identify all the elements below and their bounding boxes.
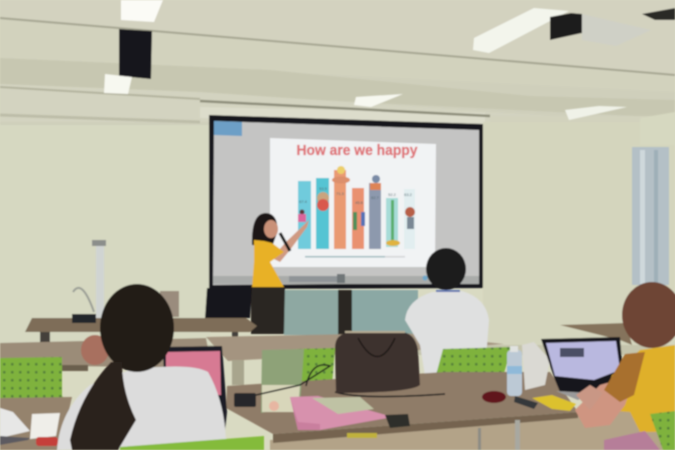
attendee in white shirt [405,248,489,376]
front left table [0,397,72,450]
chart legend [305,256,405,258]
bar chart: 45.6 [355,200,364,205]
bar chart: 71.3 [336,191,345,196]
projector [550,8,675,46]
bar chart: 67.4 [299,199,308,204]
ceiling [0,0,675,130]
microphone stand [73,240,106,321]
water bottle [507,346,522,396]
black laptop on back table [205,288,252,318]
label on table edge [347,433,377,438]
green chair: front [120,436,264,450]
notebook [0,408,60,446]
woman in floral shirt [575,282,675,432]
phone on table [385,414,410,428]
cables and device on back table [72,314,96,323]
bar chart: 52.2 [388,192,397,197]
green chair: centre right [436,347,512,375]
remote control [514,396,538,409]
woman with ponytail [57,284,226,450]
green chair: centre left [297,348,335,386]
ceiling light: centre [354,94,403,107]
yellow phone [532,395,576,411]
pink laptop [163,346,227,430]
ceiling light: left [104,74,132,94]
charger and cable [234,365,445,407]
ceiling light: top left [121,0,163,22]
white plastic bag [522,342,550,390]
mouse [482,391,506,403]
back table [25,318,257,344]
right side table [560,323,632,345]
green chair: left [0,357,66,400]
back wall [0,112,675,355]
grey box on back table [160,291,179,317]
plastic bag with snacks [261,349,304,413]
green chair: right [650,411,675,450]
handbag [335,331,420,393]
curtains below screen [284,290,418,335]
window curtain [632,147,669,285]
bar chart: 62.7 [371,195,380,200]
ceiling light: top right [473,8,569,53]
bar chart: 63.2 [404,192,413,197]
presenter [251,213,309,334]
front floor area [270,405,675,450]
pink folder [290,396,393,430]
projection screen [209,115,483,289]
front table [226,372,578,450]
middle row table [0,333,504,385]
speaker [119,29,152,79]
taskbar icons [289,274,428,283]
pink jacket on chair [604,431,660,450]
slide title: How are we happy [296,142,418,159]
bar chart: 53.9 [319,186,328,191]
bar chart [298,166,415,249]
ceiling light: right [565,106,627,120]
right laptop [541,337,622,400]
